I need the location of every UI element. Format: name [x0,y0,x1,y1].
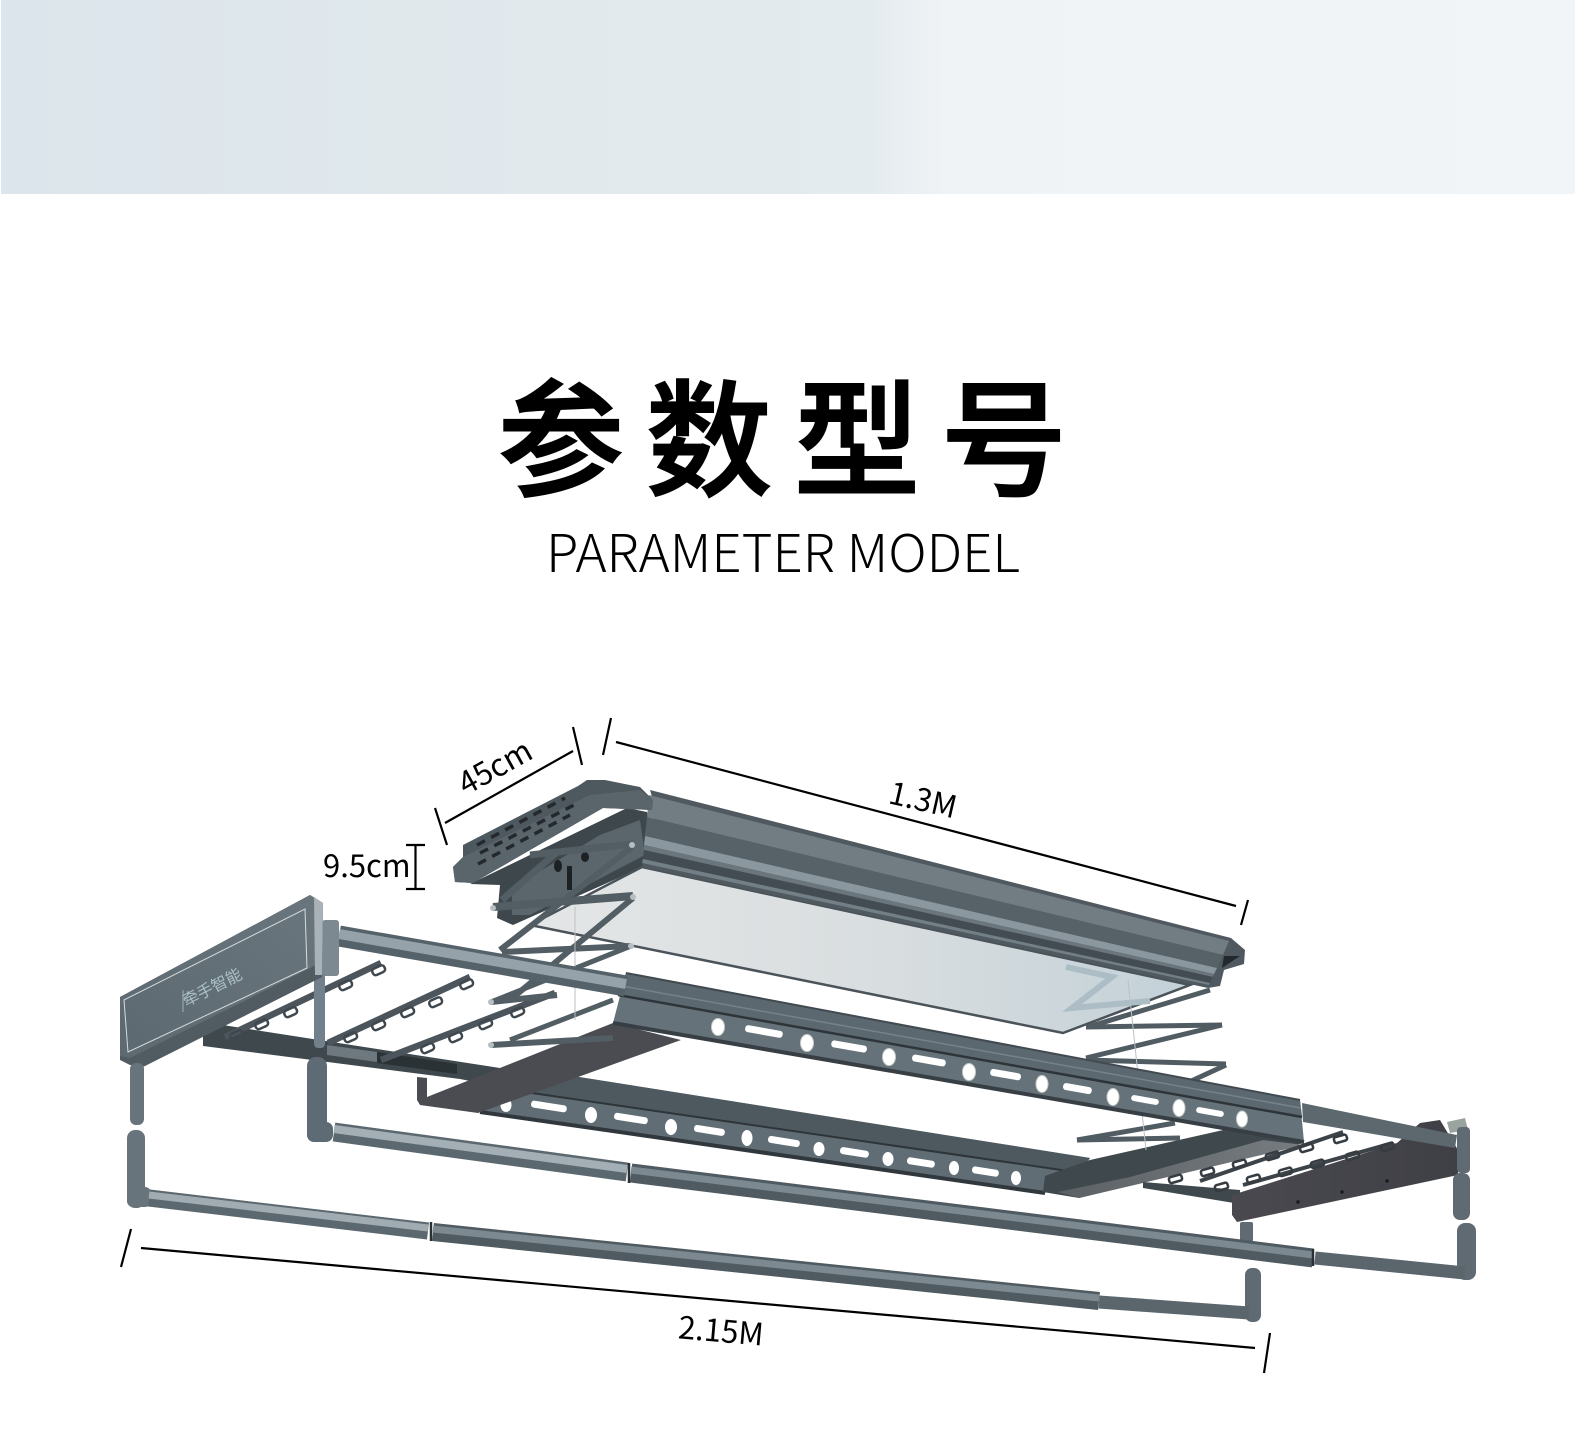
near post and arms [307,920,339,1142]
motor unit: light panel [530,867,1190,1033]
dimension: 45cm [435,726,582,845]
brand plate [120,895,323,1067]
dimension: 45cm: 45cm [448,726,539,804]
dimension: 1.3M [603,718,1248,925]
hanger bars right [1168,1132,1395,1192]
far right arms [1240,1127,1476,1322]
motor unit: under frame [470,808,657,925]
hanger bars left [225,963,555,1060]
top banner [1,0,1575,194]
telescoping rail extension right [1302,1103,1468,1148]
title: 参数型号 [498,341,1067,523]
back hanging rod [334,1129,1465,1273]
near left bracket [417,1023,681,1113]
slide rail left [203,1022,500,1083]
dimension: 1.3M: 1.3M [885,768,962,827]
dimension: 2.15M: 2.15M [677,1302,766,1355]
front silver rail [339,934,626,986]
front perforated rail [613,973,1304,1142]
front hanging rod [149,1195,1249,1313]
dimension: 9.5cm: 9.5cm [323,841,411,886]
left arms [127,1063,151,1208]
subtitle: PARAMETER MODEL [546,512,1020,587]
motor unit: aluminium body [642,790,1245,988]
right rear plate [1143,1120,1458,1222]
product: drying rack [120,780,1476,1322]
brand plate: 牵手智能 [178,961,246,1011]
scissor lift: far side [1077,990,1226,1140]
scissor lift: near side [488,842,636,1048]
far right bracket [1043,1124,1304,1198]
motor unit: end cap [453,780,653,883]
dimension: 2.15M [121,1229,1270,1373]
lift wires [575,907,1146,1150]
rear perforated rail [480,1074,1090,1193]
